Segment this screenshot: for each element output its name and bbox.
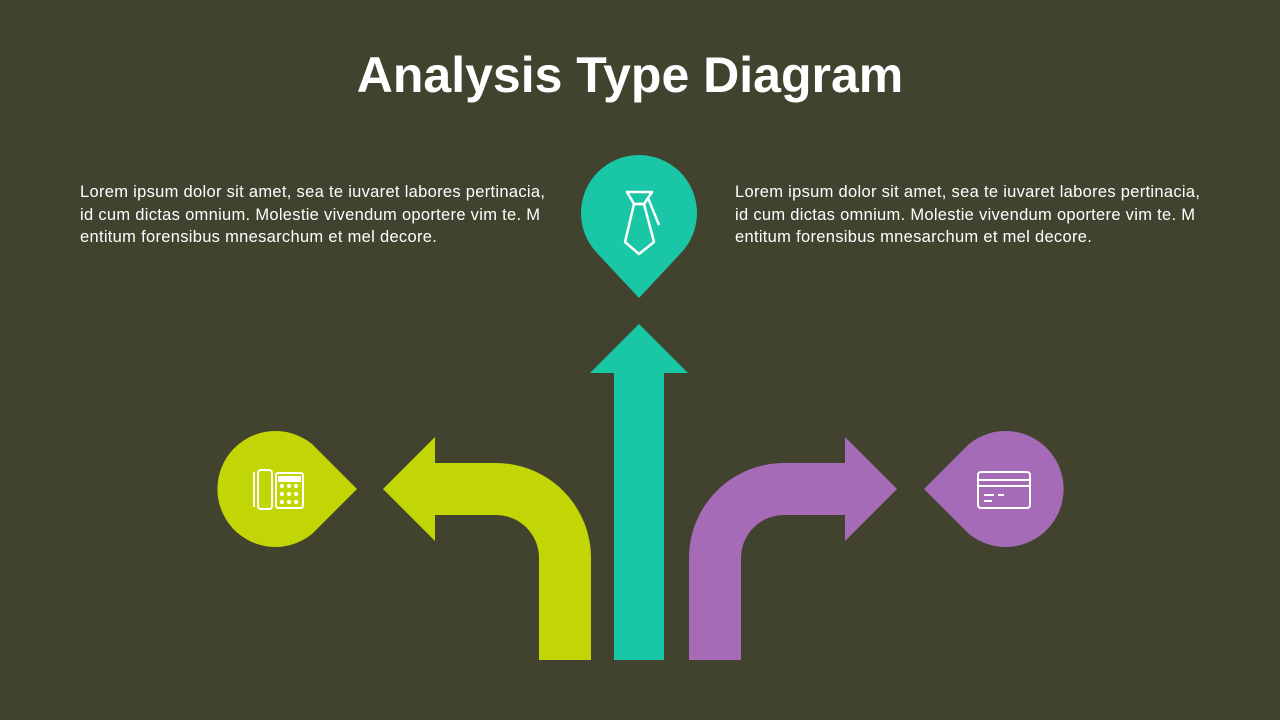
text block: left: [80, 183, 545, 246]
text block: right: [735, 183, 1200, 246]
text block: left: entitum forensibus mnesarchum et mel decore.: [80, 228, 437, 246]
text block: right: id cum dictas omnium. Molestie vivendum oportere vim te. M: [735, 206, 1195, 224]
text block: right: entitum forensibus mnesarchum et mel decore.: [735, 228, 1092, 246]
text block: left: id cum dictas omnium. Molestie vivendum oportere vim te. M: [80, 206, 540, 224]
arrow: right turn: [689, 437, 897, 660]
text block: right: Lorem ipsum dolor sit amet, sea te iuvaret labores pertinacia,: [735, 183, 1200, 201]
title: Analysis Type Diagram: [357, 47, 903, 103]
icon: tie: [625, 192, 659, 254]
icon: credit card: [978, 472, 1030, 508]
text block: left: Lorem ipsum dolor sit amet, sea te iuvaret labores pertinacia,: [80, 183, 545, 201]
pin: phone (green): [217, 431, 357, 547]
icon: phone: [254, 470, 303, 509]
arrow: center up: [590, 324, 688, 660]
pin: tie (teal): [581, 155, 697, 298]
arrow: left turn: [383, 437, 591, 660]
pin: card (purple): [924, 431, 1064, 547]
